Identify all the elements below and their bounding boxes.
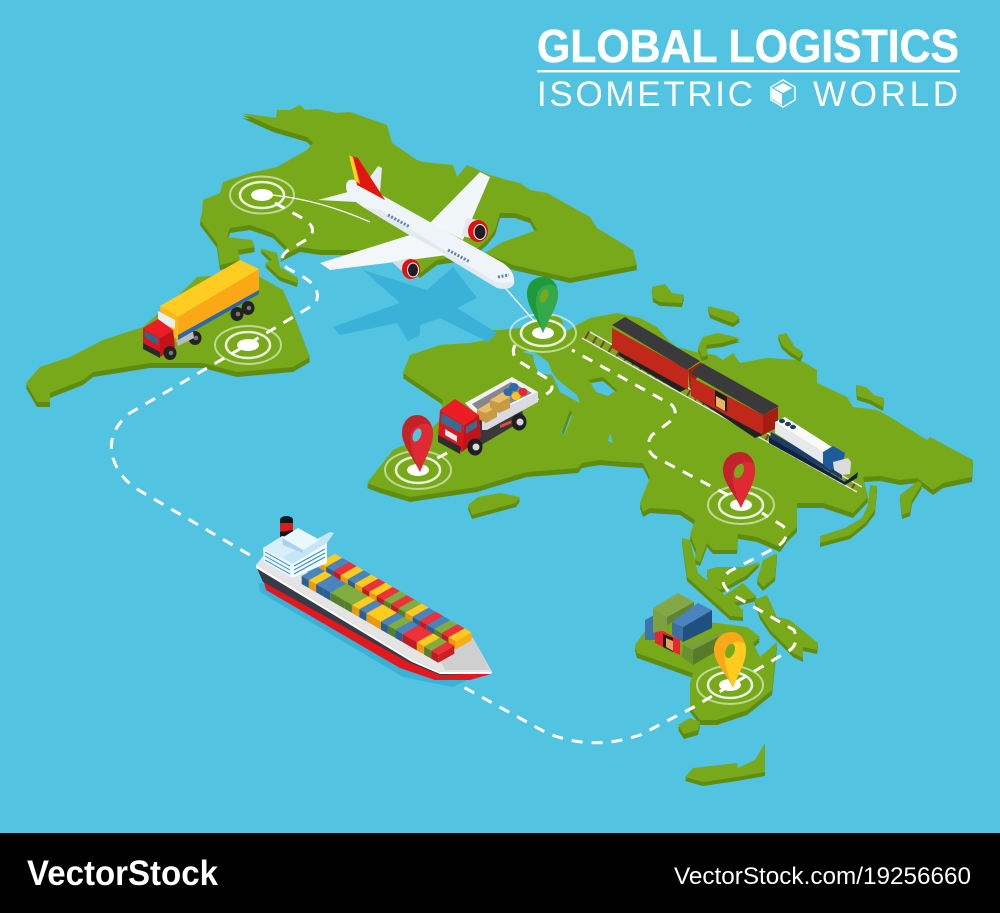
container stack [645,593,722,665]
map: islands [468,284,922,547]
bed side [482,392,538,430]
airplane [318,155,514,289]
subtitle: world: WORLD [813,75,958,114]
plane shadow [333,267,497,342]
marker: africa [385,451,451,489]
tail fin [349,155,385,200]
title block [537,20,960,114]
far wing [430,172,490,240]
footer bar [0,833,1000,913]
map: new zealand [685,743,765,786]
contrail lines [272,195,535,322]
funnel [280,516,293,542]
cab [462,415,481,452]
dashed shipping route [111,203,796,743]
pin: red asia [723,452,755,508]
barrels [504,383,528,400]
wagon door with boxes [715,390,727,412]
cargo boxes [477,392,510,423]
marker: south america [215,326,281,364]
hull dark [256,566,491,675]
pin: red africa [402,415,433,472]
marker: north america [230,176,294,214]
trailer side [178,269,259,338]
railway track [582,332,862,492]
location markers [215,176,774,704]
hull red band [262,575,491,680]
map: south america [26,273,310,407]
pin: green europe [527,277,558,333]
map: australia [635,620,777,739]
map: africa and eurasia [367,313,973,557]
near engine [392,258,420,279]
icon: cube [771,80,795,107]
containers [302,554,472,663]
open red container door [655,631,680,655]
heading: global logistics: GLOBAL LOGISTICS [537,20,959,72]
trailer top [160,260,259,317]
near wing [320,235,447,270]
stabilizer [318,192,357,202]
map: central america [260,248,298,287]
fuselage [346,180,514,289]
chassis [470,398,524,447]
container ship [256,516,492,687]
pin: yellow australia [714,632,746,688]
flatbed lorry [438,377,538,456]
footer brand: VectorStock [27,854,219,893]
top green container [653,593,694,640]
freight train [612,317,858,485]
superstructure [263,528,334,578]
locomotive [769,417,858,485]
subtitle: isometric: ISOMETRIC [537,75,753,114]
blue container [672,603,712,642]
back blue container [645,612,668,640]
far engine [462,218,488,242]
deck [256,555,492,672]
footer image url: VectorStock.com/19256660 [674,863,971,890]
marker: australia [697,666,763,704]
wheels [188,301,254,345]
wheels [512,414,526,430]
bottom green container [682,632,722,665]
marker: europe [510,314,576,352]
wagon one [612,317,701,392]
cab [160,330,175,357]
ship shadow [259,583,473,687]
marker: asia [708,486,774,524]
windows [388,215,509,277]
wagon two [690,363,779,438]
yellow lorry [143,260,259,360]
trailer front [160,306,178,340]
tail far fin [370,166,382,192]
map: southeast asia [682,532,818,662]
bed top [465,377,538,420]
map: north america and greenland [200,105,637,283]
